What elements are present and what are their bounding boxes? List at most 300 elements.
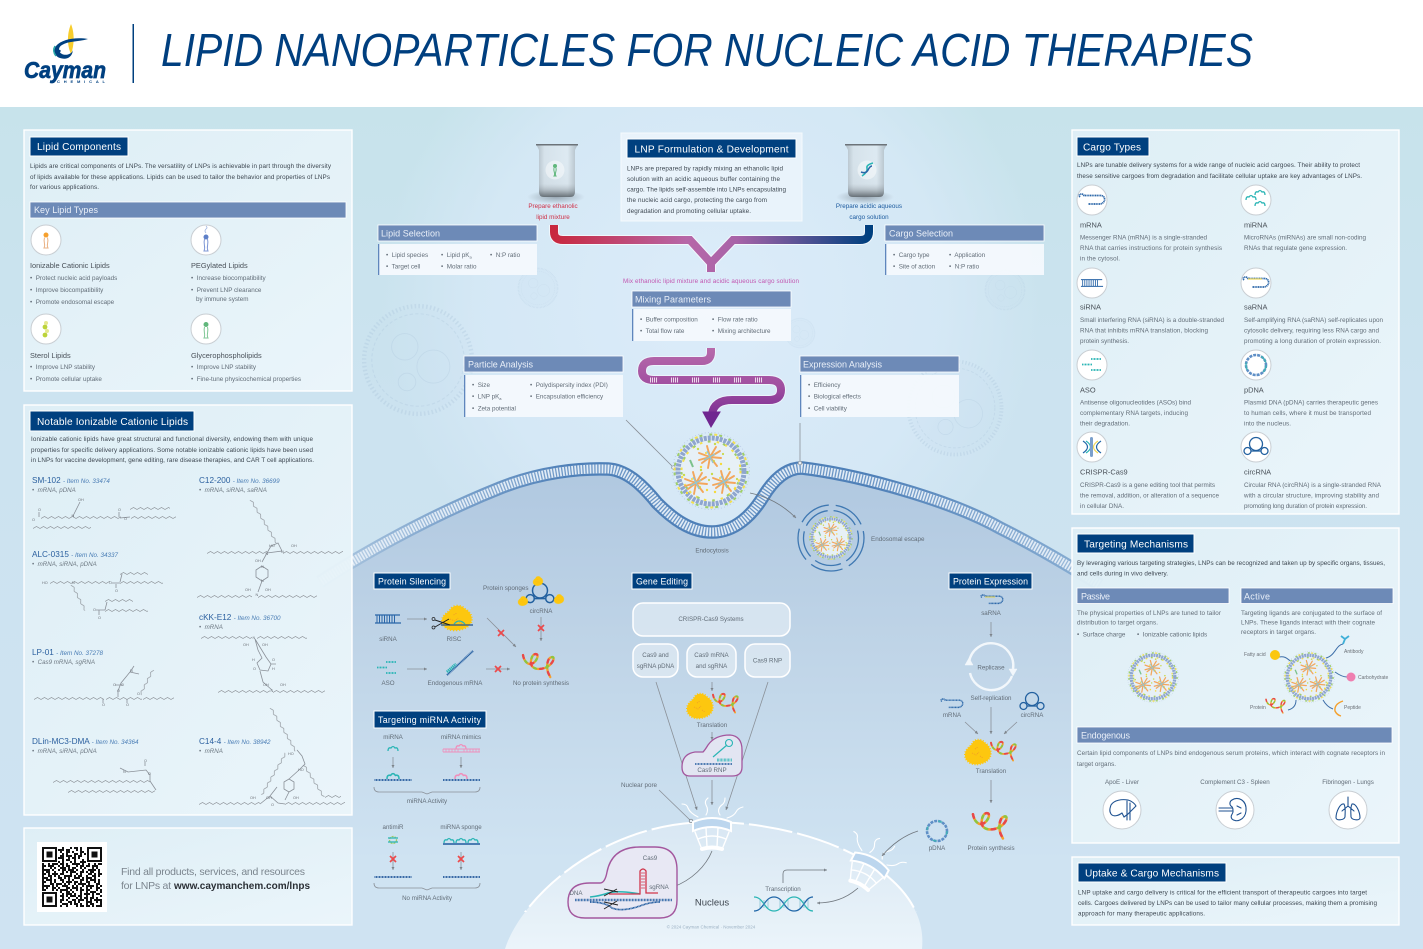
labels: silencing steps: ASO (381, 680, 395, 687)
lipid: cKK-E12: • mRNA (199, 624, 223, 631)
lipid: C12-200: N (256, 593, 258, 597)
card: saRNA: saRNA (1244, 302, 1267, 312)
section: gene editing (568, 573, 911, 930)
lipid: C12-200: N (281, 550, 284, 554)
lipid: LP-01: O (117, 689, 120, 693)
lipid: ALC-0315: ALC-0315 - Item No. 34337 (32, 550, 119, 559)
card: siRNA: Small interfering RNA (siRNA) is a double-stranded (1080, 317, 1224, 324)
text: sterol lipids: Sterol Lipids (30, 351, 71, 360)
Cas9 complex on DNA (568, 847, 677, 918)
heading: gene editing: Gene Editing (636, 576, 688, 586)
card: pDNA: pDNA (1244, 386, 1264, 394)
card: siRNA: RNA that inhibits mRNA translation, blocking (1080, 328, 1208, 334)
lipid: C12-200: • mRNA, siRNA, saRNA (199, 487, 267, 494)
label: mix solutions: Mix ethanolic lipid mixture and acidic aqueous cargo solution (623, 278, 799, 285)
labels: protein expression steps: Replicase (977, 664, 1005, 672)
uptake text: cells. Cargoes delivered by LNPs can be used to tailor many cellular processes, making them a promising (1078, 900, 1377, 907)
heading: protein expression: Protein Expression (953, 576, 1028, 586)
lipid: LP-01: O (126, 703, 129, 707)
box: particle analysis: a (499, 396, 502, 401)
intro text: By leveraging various targeting strategies, LNPs can be recognized and taken up by specific organs, tissues, (1077, 560, 1385, 567)
active targeted LNP: Fatty acid (1244, 652, 1266, 658)
lipid: LP-01: O (102, 703, 105, 707)
box: lipid selection: Lipid Selection (381, 228, 440, 238)
lipid: LP-01 (32, 648, 174, 707)
passive text: • Ionizable cationic lipids (1137, 632, 1207, 638)
text: pegylated lipids: by immune system (196, 296, 248, 303)
label: nuclear pore: Nuclear pore (621, 782, 658, 789)
lipid: C12-200: HO (269, 544, 275, 548)
card: saRNA (1241, 268, 1383, 345)
heading: targeting miRNA: Targeting miRNA Activity (378, 715, 482, 725)
blocked arrows (393, 852, 461, 870)
lipid: ALC-0315: O (93, 608, 96, 612)
label: transcription: Transcription (765, 886, 801, 893)
heading: lipid components: Lipid Components (37, 142, 121, 153)
label: nucleus: Nucleus (695, 898, 729, 908)
logo: Cayman (24, 57, 106, 83)
formulation text: solution with an acidic aqueous buffer containing the (627, 176, 780, 183)
lipid: cKK-E12: O (272, 658, 275, 662)
header background (0, 0, 1423, 107)
box: lipid selection: • Lipid pK (441, 252, 469, 259)
Cas9 RNP complex: Cas9 RNP (697, 767, 727, 774)
labels: silencing steps: No protein synthesis (513, 680, 569, 687)
labels: protein expression steps: circRNA (1021, 712, 1044, 719)
uptake text: approach for many therapeutic applications. (1078, 910, 1205, 918)
labels: silencing steps: RISC (447, 636, 462, 643)
call to action text (121, 866, 310, 892)
lipid: cKK-E12: OH (243, 643, 249, 647)
passive text: The physical properties of LNPs are tuned to tailor (1077, 610, 1221, 617)
heading: notable lipids (30, 411, 194, 431)
lipid: DLin-MC3-DMA: • mRNA, siRNA, pDNA (32, 748, 97, 755)
beaker: ethanolic lipid mixture (527, 144, 585, 204)
card: saRNA: cytosolic delivery, requiring less RNA cargo and (1244, 328, 1379, 334)
miRNA mimics (443, 744, 480, 752)
uptake text (1078, 890, 1377, 918)
heading: LNP formulation (627, 139, 796, 158)
blocked arrow: circRNA to protein (538, 617, 544, 641)
labels: miRNA activity: miRNA sponge (440, 824, 482, 831)
card: miRNA: MicroRNAs (miRNAs) are small non-coding (1244, 234, 1366, 242)
text: ionizable cationic lipids: Ionizable Cationic Lipids (30, 261, 110, 270)
labels: protein expression steps: Translation (976, 768, 1007, 775)
lipid: LP-01: O (121, 683, 124, 687)
box: particle analysis: • Polydispersity index (PDI) (530, 382, 608, 389)
box: cargo selection: • N:P ratio (949, 264, 980, 270)
RISC complex (432, 606, 473, 630)
box: Cas9 and sgRNA pDNA: Cas9 and (642, 652, 669, 659)
card: siRNA (1077, 268, 1224, 345)
protein (973, 813, 1007, 838)
lipid: SM-102: O (118, 508, 121, 512)
intro text (31, 436, 314, 464)
subheading: key lipid types (30, 202, 346, 218)
arrow: pDNA to pore (882, 831, 918, 856)
blocked arrow: mRNA to protein (486, 666, 510, 672)
endosomal escape particle (798, 505, 864, 571)
box: lipid selection: • Lipid species (386, 252, 428, 259)
connector: expression analysis to membrane (798, 423, 802, 465)
heading: notable lipids: Notable Ionizable Cationic Lipids (37, 417, 188, 428)
heading: protein silencing: Protein Silencing (378, 576, 446, 586)
endogenous mRNA (447, 651, 473, 675)
lipid: C12-200: OH (265, 588, 271, 592)
label: prepare acidic aqueous cargo solution: Prepare acidic aqueous (836, 203, 902, 210)
box: expression analysis (800, 356, 959, 417)
title: LIPID NANOPARTICLES FOR NUCLEIC ACID THERAPIES (161, 24, 1253, 76)
intro text: LNPs are tunable delivery systems for a wide range of nucleic acid cargoes. Their ability to protect (1077, 162, 1360, 169)
lipid: ALC-0315 (32, 550, 163, 620)
active targeted LNP (1244, 636, 1389, 716)
heading: lipid components (30, 137, 128, 156)
arrow: siRNA to RISC (407, 618, 427, 620)
card: pDNA: into the nucleus. (1244, 420, 1291, 428)
protein (523, 654, 554, 677)
lipid: cKK-E12: H (252, 658, 255, 662)
lipid: cKK-E12: OH (263, 683, 269, 687)
cell interior (320, 468, 1100, 949)
lipid: ALC-0315: N (72, 581, 75, 585)
lipid: ALC-0315: • mRNA, siRNA, pDNA (32, 561, 97, 568)
lipid: ALC-0315: O (115, 589, 118, 593)
formulation text: degradation and promoting cellular uptake. (627, 208, 751, 215)
icon: glycerophospholipid (191, 314, 221, 344)
box: expression analysis: • Efficiency (808, 382, 841, 389)
box: particle analysis: • Size (472, 382, 490, 389)
lipid: C12-200 (197, 476, 343, 598)
card: mRNA (1077, 185, 1222, 262)
subheading: passive (1077, 588, 1229, 604)
card: CRISPR-Cas9: CRISPR-Cas9 (1080, 468, 1128, 476)
lipid: C12-200: C12-200 - Item No. 36699 (199, 476, 280, 485)
box: expression analysis: Expression Analysis (803, 360, 882, 370)
call to action text: Find all products, services, and resources (121, 866, 305, 878)
box: mixing parameters: • Buffer composition (640, 316, 698, 324)
Cas9 complex on DNA: DNA (569, 890, 583, 897)
labels: silencing steps: siRNA (379, 636, 398, 643)
organ labels: Fibrinogen - Lungs (1322, 779, 1374, 786)
formulation text (627, 166, 786, 215)
lipid: DLin-MC3-DMA: N (123, 770, 126, 774)
labels: protein expression steps: Self-replication (971, 695, 1012, 702)
passive text (1077, 610, 1221, 638)
lipid: cKK-E12: OH (280, 683, 286, 687)
text: glycerophospholipids (191, 351, 301, 383)
arrow: pore to helix (817, 888, 858, 903)
subheading: endogenous (1077, 727, 1392, 743)
card: ASO: complementary RNA targets, inducing (1080, 410, 1188, 417)
labels: miRNA activity: miRNA mimics (441, 734, 481, 741)
X marks (390, 856, 464, 862)
labels: miRNA activity: miRNA Activity (407, 798, 448, 805)
lipid: C14-4: OH (293, 796, 299, 800)
intro text: and cells during in vivo delivery. (1077, 570, 1168, 578)
card: siRNA: protein synthesis. (1080, 338, 1129, 345)
lipid: C12-200: N (261, 579, 264, 583)
card: CRISPR-Cas9: in cellular DNA. (1080, 503, 1124, 510)
lipid: cKK-E12: N (270, 689, 274, 693)
cell membrane (320, 468, 1100, 585)
lipid: SM-102: O (124, 517, 127, 521)
organ labels: ApoE - Liver (1105, 779, 1139, 786)
endogenous text: Certain lipid components of LNPs bind endogenous serum proteins, which interact with cognate receptors in (1077, 750, 1385, 757)
targets: unbound (374, 876, 480, 878)
lipid: C14-4: • mRNA (199, 748, 223, 755)
section: targeting miRNA activity (374, 711, 486, 902)
Cas9 complex on DNA: Cas9 (643, 855, 658, 862)
lipid: cKK-E12: N (252, 636, 256, 640)
intro text (1077, 560, 1385, 578)
QR code (37, 842, 107, 912)
box: expression analysis: • Biological effects (808, 394, 861, 400)
arrow: transcription (783, 870, 827, 883)
active targeted LNP: Carbohydrate (1358, 675, 1389, 681)
card: miRNA: RNAs that regulate gene expression. (1244, 245, 1347, 252)
ribosome translation (687, 694, 738, 718)
panel: cargo types (1072, 130, 1399, 514)
intro text: Lipids are critical components of LNPs. The versatility of LNPs is achievable in part through the diversity (30, 163, 332, 170)
lipid: C12-200: OH (291, 544, 297, 548)
card: circRNA: promoting long duration of protein expression. (1244, 503, 1367, 510)
card: CRISPR-Cas9 (1077, 432, 1219, 510)
subheading: active: Active (1244, 592, 1270, 602)
box: mixing parameters: • Total flow rate (640, 328, 685, 335)
card: mRNA: in the cytosol. (1080, 256, 1120, 262)
lipid: cKK-E12: H (272, 667, 275, 671)
box: mixing parameters (632, 291, 791, 341)
panel: notable ionizable cationic lipids (24, 405, 352, 815)
lipid: cKK-E12: OH (262, 643, 268, 647)
lipid: LP-01: • Cas9 mRNA, sgRNA (32, 659, 95, 666)
antimiR (388, 836, 398, 844)
card: mRNA: mRNA (1080, 220, 1102, 230)
lipid: C14-4 (199, 707, 345, 807)
siRNA icon (375, 615, 401, 623)
intro text: properties for specific delivery applications. Some notable ionizable cationic lipids have been used (31, 447, 313, 454)
active targeted LNP: Protein (1250, 705, 1266, 711)
icon: lungs (1329, 791, 1367, 829)
blocked arrow: RISC to protein (487, 618, 516, 647)
label: endocytosis: Endocytosis (695, 548, 729, 554)
text: sterol lipids: • Improve LNP stability (30, 364, 96, 371)
lipid: SM-102: OH (78, 498, 84, 502)
lipid: C12-200: N (261, 565, 264, 569)
card: pDNA (1241, 350, 1378, 428)
subheading: endogenous: Endogenous (1081, 730, 1130, 740)
box: expression analysis: • Cell viability (808, 406, 848, 412)
labels: protein expression steps: Protein synthesis (967, 845, 1015, 852)
section: protein expression (882, 573, 1044, 856)
intro text (1077, 162, 1362, 180)
card: circRNA: Circular RNA (circRNA) is a single-stranded RNA (1244, 482, 1382, 489)
Cas9 complex on DNA: sgRNA (649, 884, 670, 891)
heading: targeting mechanisms (1077, 534, 1194, 553)
labels: protein expression steps: saRNA (981, 610, 1002, 617)
organ labels: Complement C3 - Spleen (1200, 779, 1270, 786)
card: saRNA: Self-amplifying RNA (saRNA) self-replicates upon (1244, 317, 1383, 324)
replicase cycle (965, 643, 1017, 690)
connector: nuclear pore (659, 790, 693, 823)
lipid: ALC-0315: O (98, 616, 101, 620)
box: cargo selection: • Site of action (893, 264, 936, 270)
box: Cas9 mRNA and sgRNA: Cas9 mRNA (694, 652, 730, 659)
active text: LNPs. These ligands interact with their cognate (1241, 620, 1375, 626)
lipid: C14-4: C14-4 - Item No. 38942 (199, 737, 271, 746)
text: pegylated lipids: • Prevent LNP clearance (191, 287, 262, 294)
connector: particle analysis to LNP (626, 420, 675, 469)
lipid: DLin-MC3-DMA: O (148, 772, 151, 776)
intro text: of lipids available for these applications. Lipids can be used to tailor the behavior and properties of LNPs (30, 174, 330, 181)
intro text: these sensitive cargoes from degradation and facilitate cellular uptake are key advantages of LNPs. (1077, 173, 1362, 180)
intro text: in LNPs for vaccine development, gene editing, rare disease therapies, and CAR T cell applications. (31, 457, 314, 464)
text: pegylated lipids: PEGylated Lipids (191, 261, 248, 270)
labels: protein expression steps: mRNA (943, 712, 962, 719)
label: prepare acidic aqueous cargo solution: cargo solution (849, 214, 889, 221)
saRNA icon (981, 595, 1003, 603)
labels: miRNA activity: No miRNA Activity (402, 895, 453, 902)
logo: CHEMICAL (57, 79, 106, 84)
box: cargo selection: • Cargo type (893, 252, 930, 259)
card: ASO: Antisense oligonucleotides (ASOs) bind (1080, 400, 1191, 406)
endogenous text: target organs. (1077, 761, 1116, 768)
box: mixing parameters: Mixing Parameters (635, 294, 712, 304)
icon: liver (1103, 791, 1141, 829)
beaker: acidic aqueous cargo (836, 144, 894, 204)
panel: lipid components (24, 130, 352, 391)
lipid: C14-4: HO (288, 752, 294, 756)
lipid: LP-01: O (137, 692, 140, 696)
labels: protein expression steps: pDNA (929, 845, 946, 852)
panel: targeting mechanisms (1072, 528, 1399, 843)
heading: uptake and cargo mechanisms (1078, 863, 1226, 882)
box: lipid selection (378, 225, 537, 275)
heading: protein silencing (374, 573, 450, 589)
lipid: C14-4: HO (298, 768, 304, 772)
lipid: DLin-MC3-DMA: O (144, 759, 147, 763)
label: prepare ethanolic lipid mixture (528, 203, 578, 221)
lipid: C12-200: N (266, 552, 268, 556)
active targeted LNP: Antibody (1344, 649, 1364, 655)
miRNA sponge (443, 838, 480, 844)
text: ionizable cationic lipids (30, 261, 117, 306)
lipid: C14-4: OH (250, 796, 256, 800)
box: mixing parameters: • Flow rate ratio (712, 316, 758, 324)
active text: receptors in target organs. (1241, 629, 1316, 636)
text: glycerophospholipids: • Improve LNP stability (191, 364, 257, 371)
arrow: pore to Cas9 complex (673, 851, 712, 887)
targets: miRNA bound (374, 774, 480, 780)
endogenous text (1077, 750, 1385, 768)
text: ionizable cationic lipids: • Protect nucleic acid payloads (30, 275, 117, 282)
faint background particles (364, 268, 1025, 455)
box: Cas9 RNP (745, 644, 790, 677)
passive text: distribution to target organs. (1077, 620, 1158, 626)
formulation text: cargo. The lipids self-assemble into LNPs encapsulating (627, 186, 786, 194)
nuclear pore: top (682, 798, 743, 849)
lipid: SM-102: O (38, 508, 41, 512)
heading: targeting miRNA (374, 711, 486, 728)
passive LNP (1128, 652, 1178, 702)
heading: cargo types: Cargo Types (1083, 142, 1141, 154)
card: CRISPR-Cas9: CRISPR-Cas9 is a gene editing tool that permits (1080, 482, 1215, 489)
card: siRNA: siRNA (1080, 302, 1101, 312)
lipid: DLin-MC3-DMA: DLin-MC3-DMA - Item No. 34364 (32, 737, 139, 746)
active targeted LNP: Peptide (1344, 705, 1361, 711)
heading: gene editing (632, 573, 692, 589)
panel: website link and QR code (24, 828, 352, 925)
lipid: ALC-0315: O (109, 581, 112, 585)
heading: cargo types (1077, 137, 1149, 156)
card: pDNA: to human cells, where it must be transported (1244, 410, 1371, 417)
arrows: miRNA to targets (393, 757, 461, 768)
call to action text: for LNPs at (121, 880, 171, 892)
labels: miRNA activity (383, 734, 482, 902)
text: sterol lipids: • Promote cellular uptake (30, 376, 102, 383)
section: protein silencing (374, 573, 569, 687)
lipid: cKK-E12: O (253, 667, 256, 671)
box: Cas9 RNP: Cas9 RNP (753, 658, 782, 664)
box: particle analysis: • LNP pK (472, 394, 499, 400)
heading: protein expression (949, 573, 1032, 589)
circRNA icon (1020, 692, 1044, 710)
box: particle analysis: • Zeta potential (472, 406, 516, 412)
DNA helix (754, 897, 813, 911)
lipid: SM-102: • mRNA, pDNA (32, 487, 76, 494)
icon: kidney (1216, 791, 1254, 829)
arrow: to endosomal escape (750, 493, 796, 518)
label: prepare ethanolic lipid mixture: Prepare ethanolic (528, 203, 578, 210)
Cas9 RNP complex (682, 735, 742, 776)
lipid: LP-01: N (130, 669, 133, 673)
box: CRISPR-Cas9 systems: CRISPR-Cas9 Systems (678, 616, 744, 623)
card: circRNA: with a circular structure, improving stability and (1243, 492, 1379, 500)
formulation text: the nucleic acid cargo, protecting the cargo from (627, 197, 767, 204)
mRNA icon (941, 699, 963, 707)
box: cargo selection (885, 225, 1044, 275)
box: cargo selection: • Application (949, 252, 986, 259)
card: pDNA: Plasmid DNA (pDNA) carries therapeutic genes (1244, 400, 1378, 406)
box: mixing parameters: • Mixing architecture (712, 328, 771, 335)
label: endosomal escape: Endosomal escape (871, 536, 925, 543)
lipid: cKK-E12 (199, 613, 325, 693)
organ labels (1105, 779, 1374, 786)
formulation text: LNPs are prepared by rapidly mixing an ethanolic lipid (627, 166, 783, 172)
card: CRISPR-Cas9: the removal, addition, or alteration of a sequence (1080, 492, 1219, 500)
passive text: • Surface charge (1077, 632, 1126, 638)
text: ionizable cationic lipids: • Promote endosomal escape (30, 299, 115, 306)
labels: miRNA activity: miRNA (383, 734, 404, 741)
box: Cas9 and sgRNA pDNA: sgRNA pDNA (637, 663, 675, 670)
box: lipid selection: • Molar ratio (441, 264, 477, 270)
ribosome translation (965, 740, 1016, 764)
labels: protein expression steps (929, 610, 1044, 852)
box: lipid selection: • Target cell (386, 264, 420, 270)
labels: silencing steps (379, 608, 569, 687)
text: ionizable cationic lipids: • Improve biocompatibility (30, 287, 104, 294)
arrows: gene editing (656, 682, 768, 810)
lipid: DLin-MC3-DMA (32, 737, 156, 793)
label: translation: Translation (697, 722, 728, 729)
copyright: © 2024 Cayman Chemical · November 2024 (667, 924, 756, 930)
active text: Targeting ligands are conjugated to the surface of (1241, 610, 1382, 617)
box: lipid selection: • N:P ratio (490, 252, 521, 259)
card: saRNA: promoting a long duration of protein expression. (1244, 338, 1381, 345)
icon: ionizable cationic lipid (31, 225, 61, 255)
box: Cas9 and sgRNA pDNA (633, 644, 678, 677)
logo (24, 24, 106, 84)
